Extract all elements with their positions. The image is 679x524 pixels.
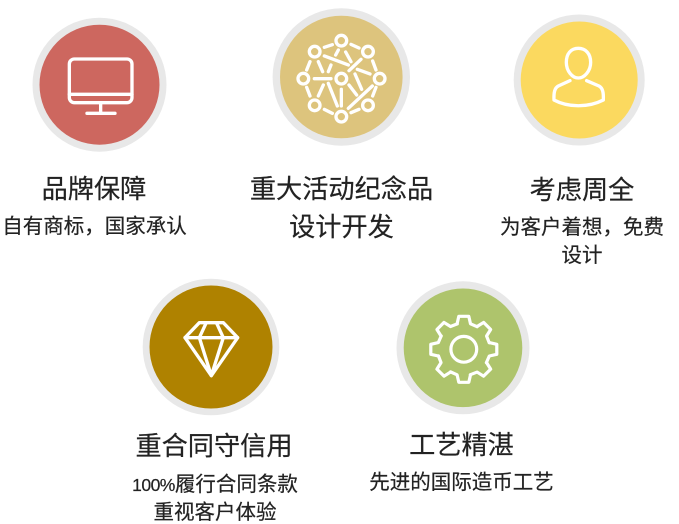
panel: 重大活动纪念品设计开发 [250,8,433,242]
text block: 先进的国际造币工艺 [369,471,554,494]
heading: 工艺精湛 [409,430,514,460]
heading: 重合同守信用 [135,431,293,461]
icon: gear badge [396,281,530,414]
heading second line: 设计开发 [289,212,394,242]
text block second line: 重视客户体验 [154,501,276,524]
panel: 重合同守信用 [132,279,298,524]
text block second line: 设计 [562,244,602,267]
text block: 100%履行合同条款 [132,473,298,496]
icon: person badge [514,14,645,146]
icon: diamond badge [143,279,279,415]
heading: 品牌保障 [42,174,146,204]
icon: monitor badge [32,18,166,152]
text block: 为客户着想，免费 [500,216,664,239]
panel: 考虑周全 [500,14,664,267]
panel: 品牌保障 [2,18,187,238]
panel: 工艺精湛 [369,281,554,494]
icon: network badge [273,8,410,146]
heading: 重大活动纪念品 [250,174,433,204]
text block: 自有商标，国家承认 [2,215,187,238]
heading: 考虑周全 [530,175,634,205]
